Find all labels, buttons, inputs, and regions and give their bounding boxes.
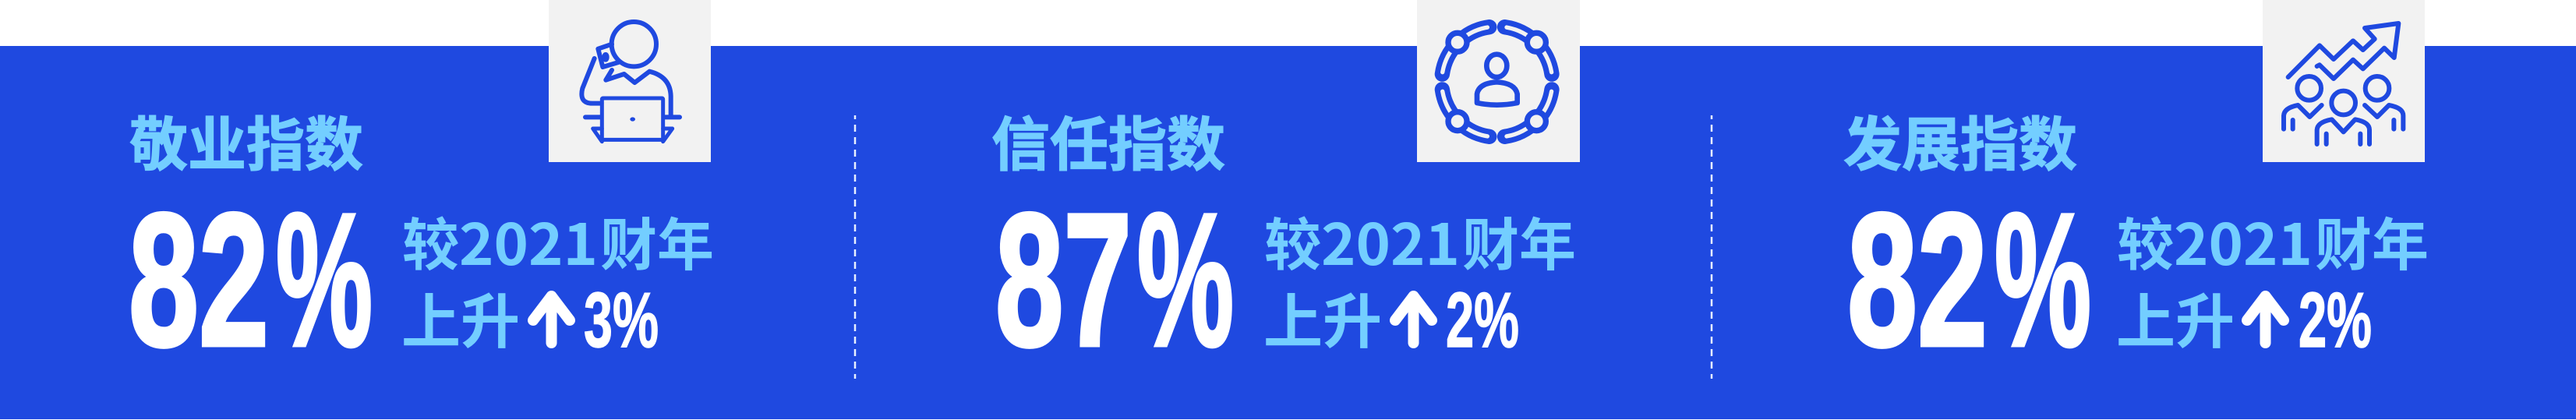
big number 87%: % — [1137, 175, 1234, 386]
comparison label — [2117, 199, 2429, 282]
icon box: team with rising arrow — [2263, 0, 2425, 162]
comparison label: 较 — [402, 199, 459, 282]
big number 82%: 82 — [1847, 175, 1988, 386]
divider — [854, 115, 856, 379]
comparison label: 2021 — [2174, 199, 2313, 282]
icon box: person within ring — [1417, 0, 1580, 162]
comparison label: 较 — [1264, 199, 1321, 282]
comparison label: 财年 — [600, 199, 714, 282]
comparison label: 财年 — [2315, 199, 2429, 282]
big number 82%: % — [276, 175, 373, 386]
panel: engagement index — [129, 0, 714, 386]
rise label: 上升 — [401, 274, 520, 360]
heading: development index: 发展指数 — [1843, 112, 2077, 178]
heading: engagement index: 敬业指数 — [129, 112, 363, 178]
panel: trust index — [991, 0, 1580, 386]
icon: up arrow — [2247, 296, 2284, 343]
rise label: 上升 — [2116, 274, 2235, 360]
comparison label: 较 — [2117, 199, 2174, 282]
change value 2%: 2% — [1446, 277, 1519, 364]
icon box: person on phone with laptop — [549, 0, 711, 162]
change value 3%: 3% — [584, 277, 659, 364]
comparison label: 2021 — [1321, 199, 1460, 282]
rise label: 上升 — [1263, 274, 1382, 360]
big number 82%: % — [1995, 175, 2091, 386]
comparison label: 财年 — [1462, 199, 1576, 282]
icon: up arrow — [533, 296, 570, 343]
big number 82%: 82 — [129, 175, 269, 386]
heading: trust index: 信任指数 — [991, 112, 1225, 178]
comparison label — [1264, 199, 1576, 282]
divider — [1711, 115, 1712, 379]
comparison label — [402, 199, 714, 282]
change value 2%: 2% — [2299, 277, 2372, 364]
big number 87%: 87 — [995, 175, 1132, 386]
icon: up arrow — [1395, 296, 1432, 343]
panel: development index — [1843, 0, 2429, 386]
comparison label: 2021 — [459, 199, 598, 282]
